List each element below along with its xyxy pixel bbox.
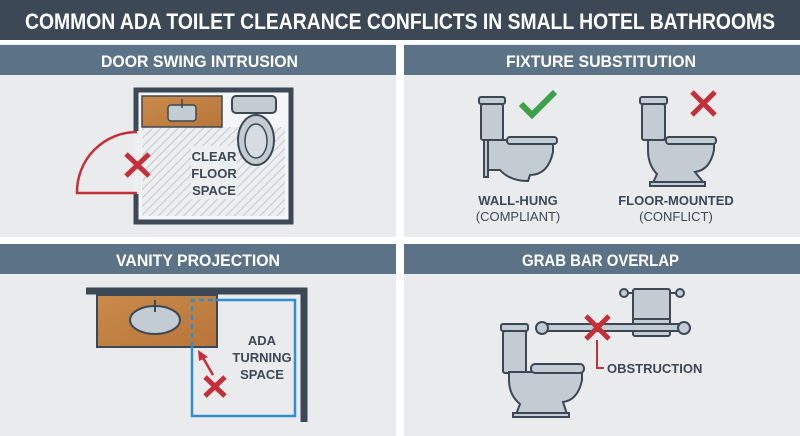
heading: door swing intrusion bbox=[0, 45, 396, 75]
icon: wall-hung toilet bbox=[479, 97, 557, 181]
label: wall-hung bbox=[476, 193, 560, 224]
icon: grab bar bbox=[536, 322, 690, 334]
icon: red x with obstruction callout: OBSTRUCTION bbox=[607, 361, 702, 376]
icon: towel bar bbox=[620, 289, 684, 336]
heading: grab bar overlap: GRAB BAR OVERLAP bbox=[522, 251, 679, 270]
icon: floor-mounted toilet bbox=[640, 97, 716, 186]
heading: door swing intrusion: DOOR SWING INTRUSION bbox=[101, 52, 298, 71]
door swing arc bbox=[77, 132, 137, 193]
panel: vanity projection bbox=[0, 244, 396, 436]
label: floor-mounted: (CONFLICT) bbox=[639, 209, 713, 224]
label: wall-hung: (COMPLIANT) bbox=[476, 209, 560, 224]
icon: red x with obstruction callout bbox=[586, 316, 702, 376]
heading: fixture substitution: FIXTURE SUBSTITUTION bbox=[506, 52, 696, 71]
ada turning space: TURNING bbox=[232, 350, 292, 365]
panel: grab bar overlap bbox=[404, 244, 800, 436]
walls bbox=[86, 291, 304, 422]
arrow bbox=[198, 350, 213, 375]
icon: red x bbox=[205, 377, 225, 396]
vanity with sink bbox=[97, 295, 217, 347]
icon: green check bbox=[521, 92, 555, 115]
heading: vanity projection: VANITY PROJECTION bbox=[116, 251, 280, 270]
label: clear floor space: CLEAR bbox=[192, 149, 237, 164]
heading: grab bar overlap bbox=[404, 244, 800, 274]
panel: door swing intrusion bbox=[0, 44, 396, 237]
panel: fixture substitution bbox=[404, 44, 800, 237]
floor plan: room bbox=[133, 90, 291, 222]
icon: toilet bbox=[501, 324, 584, 417]
ada turning space: SPACE bbox=[240, 367, 284, 382]
label: clear floor space: SPACE bbox=[192, 183, 236, 198]
heading: fixture substitution bbox=[404, 45, 800, 75]
heading: vanity projection bbox=[0, 244, 396, 274]
icon: red x bbox=[692, 92, 715, 115]
icon: red x bbox=[126, 154, 149, 176]
ada turning space bbox=[192, 300, 295, 416]
label: wall-hung: WALL-HUNG bbox=[478, 193, 558, 208]
label: clear floor space: FLOOR bbox=[191, 166, 237, 181]
ada turning space: ADA bbox=[248, 333, 277, 348]
label: floor-mounted bbox=[618, 193, 734, 224]
title bbox=[0, 0, 800, 40]
label: clear floor space bbox=[191, 146, 237, 199]
label: floor-mounted: FLOOR-MOUNTED bbox=[618, 193, 734, 208]
